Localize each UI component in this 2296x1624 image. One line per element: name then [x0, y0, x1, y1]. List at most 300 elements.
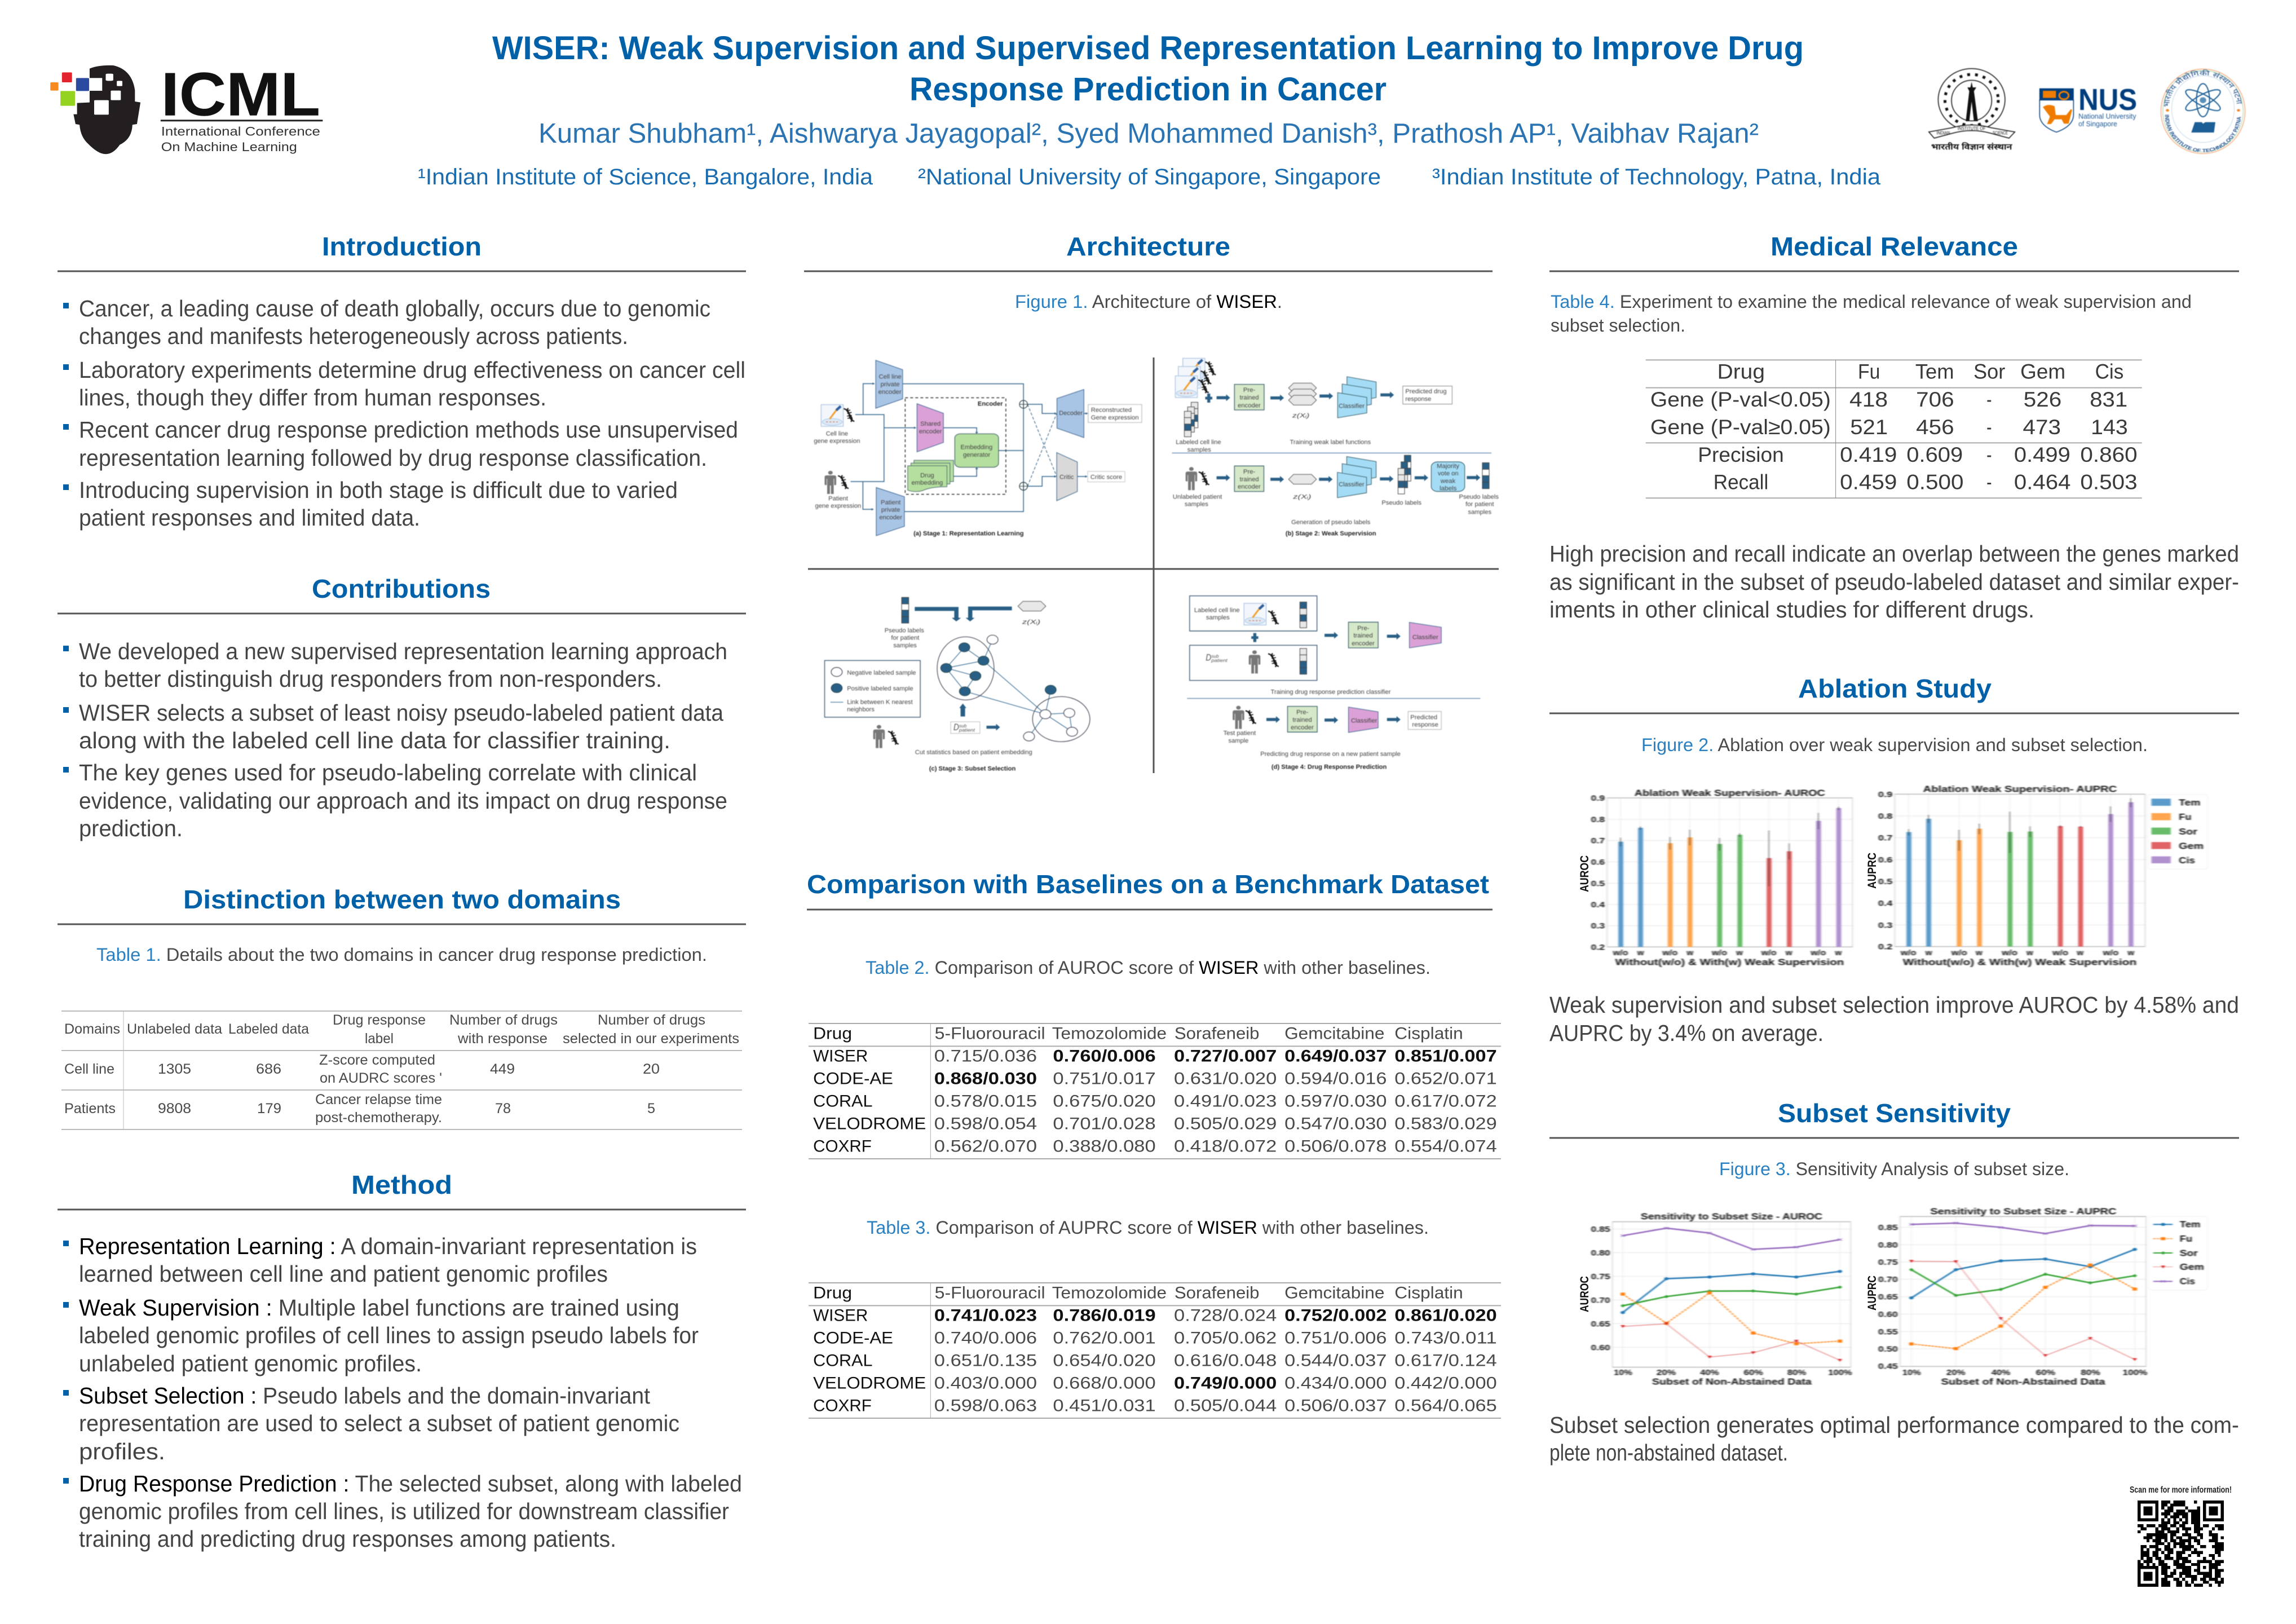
- stage label (c): (c) Stage 3: Subset Selection: [929, 765, 1015, 772]
- line chart: AUPRC sensitivity: 0.45: [1878, 1362, 1898, 1371]
- box: labeled cell line samples: Labeled cell line: [1194, 606, 1240, 614]
- bar chart: AUROC: w: [1736, 948, 1743, 957]
- bullet: supervision: [63, 477, 678, 531]
- bar chart: AUPRC: Ablation Weak Supervision- AUPRC: [1923, 784, 2117, 794]
- block: classifier stack 2: Classifier: [1339, 480, 1365, 488]
- block: classifier 2: Classifier: [1351, 717, 1377, 724]
- line chart: AUPRC sensitivity: 0.55: [1878, 1327, 1898, 1336]
- icon: unlabeled patient: [1186, 467, 1209, 490]
- bar chart: AUROC: 0.9: [1591, 794, 1605, 802]
- line chart: AUROC sensitivity: 0.65: [1591, 1320, 1610, 1329]
- label: labeled cell line samples: [1176, 438, 1221, 453]
- bar chart: AUROC: 0.6: [1591, 858, 1605, 867]
- logo: IIT Patna: भारतीय प्रौद्योगिकी संस्थान पटना: [2163, 69, 2242, 107]
- label: pseudo labels for patient samples: [885, 626, 924, 649]
- bar chart: AUPRC: w/o: [2103, 948, 2118, 957]
- label: unlabeled patient samples: [1173, 493, 1222, 508]
- text: subset finding: Subset selection generates optimal performance compared to the com-: [1549, 1412, 2239, 1438]
- bar chart: AUROC: 0.7: [1591, 837, 1605, 845]
- bullet: cancer: [63, 295, 710, 349]
- output: predicted drug response: Predicted drug: [1405, 388, 1447, 395]
- bullet: weak supervision: labeled genomic profiles of cell lines to assign pseudo labels for: [79, 1322, 699, 1348]
- table 4: Gene (P-val<0.05): [1650, 387, 1831, 411]
- block: cell line private encoder: encoder: [878, 388, 902, 395]
- bullet: laboratory: [63, 357, 745, 411]
- table 3: 0.705/0.062: [1174, 1328, 1277, 1347]
- pseudo labels stack: [1398, 455, 1411, 494]
- line chart: AUPRC sensitivity: 0.75: [1878, 1258, 1898, 1266]
- text: subset finding: plete non-abstained dataset.: [1549, 1440, 1788, 1466]
- table 3: CORAL: [813, 1351, 872, 1370]
- table 1: on AUDRC scores ': [320, 1070, 442, 1086]
- label: unlabeled patient samples: Unlabeled patient: [1173, 493, 1222, 500]
- output: predicted drug response: [1403, 386, 1452, 404]
- affiliations: [418, 165, 1881, 189]
- table 2: 0.675/0.020: [1053, 1091, 1156, 1110]
- table 3: 0.786/0.019: [1053, 1305, 1156, 1325]
- bar chart: AUPRC: w: [1975, 948, 1982, 957]
- line chart: AUROC sensitivity: 80%: [1787, 1368, 1806, 1377]
- label: pseudo labels for patient samples: [1459, 493, 1499, 515]
- diagram: stage 2 weak supervision: z(Xᵢ): [1292, 493, 1311, 500]
- block: pre-trained encoder: encoder: [1238, 401, 1261, 409]
- block: pre-trained encoder: Pre-: [1357, 624, 1370, 632]
- logo: NUS: NUS: [2078, 83, 2137, 117]
- table 1: 9808: [158, 1101, 191, 1116]
- caption: Figure 2: Figure 2. Ablation over weak supervision and subset selection.: [1641, 735, 2148, 755]
- output: reconstructed gene expression: Gene expression: [1091, 414, 1139, 421]
- bar chart: AUPRC: w: [2127, 948, 2134, 957]
- table 2: Drug: [813, 1024, 852, 1043]
- output: critic score: [1088, 471, 1125, 482]
- logo: ICML: On Machine Learning: [161, 140, 297, 154]
- bullet: drug response prediction: Drug Response Prediction : The selected subset, along with labeled: [79, 1471, 742, 1497]
- table 2: 0.701/0.028: [1053, 1114, 1156, 1133]
- table 3: Temozolomide: [1052, 1283, 1167, 1302]
- bar chart: AUPRC: w: [2026, 948, 2033, 957]
- box: patient subset: patient: [1211, 658, 1228, 664]
- table 3: 5-Fluorouracil: [935, 1283, 1045, 1302]
- bar chart: AUPRC: 0.9: [1878, 790, 1892, 799]
- text: 0.652/0.071: [1394, 1069, 1497, 1088]
- line chart: AUPRC sensitivity: 0.50: [1878, 1345, 1898, 1353]
- bar chart: AUROC: 0.5: [1591, 879, 1605, 888]
- table 3: 0.598/0.063: [934, 1396, 1037, 1415]
- block: classifier 2: [1348, 707, 1378, 732]
- block: decoder: [1057, 390, 1084, 438]
- table 4: Drug: [1717, 360, 1765, 383]
- table 4: 143: [2091, 415, 2128, 439]
- caption: Table 3: Table 3. Comparison of AUPRC score of WISER with other baselines.: [867, 1217, 1429, 1238]
- heading: Introduction: Introduction: [322, 232, 482, 261]
- heading: Medical Relevance: Medical Relevance: [1770, 232, 2018, 261]
- block: pre-trained encoder: [1234, 385, 1264, 410]
- icon: patient: [824, 471, 849, 494]
- block: majority vote: [1431, 462, 1465, 492]
- label: cell line gene expression: Cell line: [826, 430, 848, 437]
- panel: Subset Sensitivity: [1549, 1098, 2239, 1466]
- bullet: drug response prediction: training and predicting drug responses among patients.: [79, 1526, 616, 1552]
- table 3: 0.651/0.135: [934, 1351, 1037, 1370]
- label: pseudo labels for patient samples: Pseudo labels: [1459, 493, 1499, 500]
- diagram: stage 3 subset selection: z(Xᵢ): [1022, 619, 1040, 625]
- bar chart: AUROC: w/o: [1761, 948, 1777, 957]
- table 4: -: [1986, 443, 1992, 466]
- legend: ablation drugs: Cis: [2179, 855, 2195, 866]
- text: 0.554/0.074: [1394, 1136, 1497, 1155]
- bullet: weak supervision: Weak Supervision : Multiple label functions are trained using: [79, 1295, 679, 1321]
- block: patient private encoder: [876, 488, 904, 536]
- bar chart: AUROC: w: [1686, 948, 1693, 957]
- table 1: Z-score computed: [319, 1052, 435, 1068]
- bar chart: AUROC: Without(w/o) & With(w) Weak Supervision: [1615, 957, 1844, 967]
- logo: ICML: [50, 60, 323, 154]
- line chart: AUROC sensitivity: 60%: [1744, 1368, 1763, 1377]
- table 1: 20: [643, 1061, 660, 1077]
- bullet: key genes: prediction.: [79, 815, 183, 841]
- block: classifier: Classifier: [1412, 633, 1438, 641]
- table 1: 1305: [158, 1061, 191, 1077]
- line chart: AUPRC sensitivity: 60%: [2036, 1368, 2055, 1377]
- table 4: Precision: [1698, 443, 1784, 466]
- output: critic score: Critic score: [1090, 473, 1122, 480]
- block: pre-trained encoder: [1348, 622, 1378, 648]
- table 3: 0.740/0.006: [934, 1328, 1037, 1347]
- bar chart: AUROC: 0.3: [1591, 922, 1605, 930]
- block: shared encoder: encoder: [919, 427, 942, 435]
- text: ablation finding: AUPRC by 3.4% on average.: [1549, 1020, 1823, 1046]
- table 3: Gemcitabine: [1284, 1283, 1384, 1302]
- bar chart: AUROC: 0.8: [1591, 815, 1605, 824]
- text: 0.861/0.020: [1394, 1305, 1497, 1325]
- line chart: AUPRC sensitivity: 20%: [1946, 1368, 1966, 1377]
- bar chart: AUROC: w/o: [1662, 948, 1677, 957]
- label: test patient sample: [1224, 729, 1256, 744]
- title: WISER: Weak Supervision and Supervised Representation Learning to Improve Drug: [492, 30, 1804, 67]
- output: predicted response: [1408, 712, 1441, 730]
- bar chart: AUROC: w: [1637, 948, 1644, 957]
- block: majority vote: weak: [1440, 477, 1455, 484]
- table 3: 0.741/0.023: [934, 1305, 1037, 1325]
- block: classifier stack 2: [1337, 457, 1376, 498]
- table 4: Sor: [1973, 360, 2005, 383]
- diagram: stage 2 weak supervision: Generation of pseudo labels: [1291, 518, 1371, 526]
- label: patient gene expression: Patient: [828, 495, 848, 502]
- table 1: 179: [257, 1101, 281, 1116]
- text: medical relevance finding: iments in other clinical studies for different drugs.: [1549, 597, 2034, 623]
- line chart: AUPRC sensitivity: 10%: [1902, 1368, 1921, 1377]
- bullet: recent methods: Recent cancer drug response prediction methods use unsupervised: [79, 417, 738, 443]
- line chart: AUPRC sensitivity: 0.60: [1878, 1310, 1898, 1319]
- table 1: Unlabeled data: [127, 1021, 222, 1037]
- panel: Introduction: [58, 232, 746, 531]
- box: D sub patient: sub: [959, 723, 966, 729]
- block: drug embedding: Drug: [920, 471, 934, 479]
- icon: test patient: [1233, 706, 1256, 729]
- table 2: 0.631/0.020: [1174, 1069, 1277, 1088]
- block: majority vote: vote on: [1438, 470, 1459, 477]
- label: labeled cell line samples: samples: [1187, 446, 1211, 453]
- table 4: 456: [1916, 415, 1954, 439]
- bullet: representation learning: Representation Learning : A domain-invariant representation is: [79, 1233, 697, 1259]
- block: pre-trained encoder 2: Pre-: [1296, 708, 1309, 716]
- table 1: Number of drugs: [449, 1012, 558, 1028]
- output: predicted response: Predicted: [1410, 713, 1437, 721]
- table 3: 0.752/0.002: [1284, 1305, 1387, 1325]
- pseudo labels bar: [1482, 463, 1489, 489]
- line chart: AUPRC sensitivity: Subset of Non-Abstained Data: [1941, 1376, 2105, 1387]
- legend: [824, 660, 920, 717]
- block: embedding generator: [955, 434, 999, 467]
- legend: ablation drugs: Sor: [2179, 827, 2197, 837]
- block: pre-trained encoder 2: [1287, 707, 1317, 732]
- text: International Conference: [161, 125, 320, 139]
- table 2: COXRF: [813, 1136, 872, 1155]
- diagram: stage 2 weak supervision: [1172, 358, 1499, 537]
- table 3: 0.728/0.024: [1174, 1305, 1277, 1325]
- box: patient subset: D: [1206, 652, 1211, 663]
- table 2: CODE-AE: [813, 1069, 893, 1088]
- legend: sensitivity drugs: Cis: [2180, 1276, 2195, 1286]
- label: test patient sample: Test patient: [1224, 729, 1256, 736]
- line chart: AUPRC sensitivity: 80%: [2081, 1368, 2100, 1377]
- text: subset finding: [1549, 1412, 2239, 1466]
- heading: Architecture: Architecture: [1066, 232, 1230, 261]
- block: pre-trained encoder 2: trained: [1292, 716, 1312, 723]
- line chart: AUROC sensitivity: Sensitivity to Subset Size - AUROC: [1641, 1211, 1822, 1221]
- bar chart: AUROC: w: [1835, 948, 1842, 957]
- bar chart: AUPRC: 0.3: [1878, 921, 1892, 930]
- bar chart: AUROC: w/o: [1613, 948, 1628, 957]
- text: ICML: [161, 60, 320, 129]
- block: pre-trained encoder: Pre-: [1243, 386, 1255, 394]
- text: ablation finding: Weak supervision and subset selection improve AUROC by 4.58% and: [1549, 992, 2239, 1018]
- line chart: AUROC sensitivity: 0.70: [1591, 1296, 1610, 1305]
- bullet: new approach: We developed a new supervised representation learning approach: [79, 638, 727, 664]
- title: [492, 30, 1804, 108]
- box: D sub patient: patient: [959, 728, 975, 733]
- table 1: Domains: [64, 1021, 120, 1037]
- table 4: 0.860: [2080, 443, 2138, 466]
- diagram: stage 4 drug response prediction: Training drug response prediction classifier: [1271, 688, 1391, 695]
- bar chart: AUPRC: w/o: [1951, 948, 1967, 957]
- logo: IISc: SCIENCE: [1993, 131, 2008, 136]
- heading: Ablation Study: Ablation Study: [1798, 674, 1992, 703]
- output: reconstructed gene expression: [1088, 404, 1142, 422]
- table 1: 5: [647, 1101, 655, 1116]
- table 3: [809, 1283, 1501, 1418]
- block: pre-trained encoder 2: trained: [1240, 475, 1259, 483]
- caption: Table 1: Table 1. Details about the two domains in cancer drug response prediction.: [96, 945, 707, 965]
- caption: Table 4: Table 4. Experiment to examine the medical relevance of weak supervision and: [1551, 292, 2192, 312]
- block: critic: Critic: [1059, 473, 1074, 480]
- bar chart: AUPRC: AUPRC: [1866, 853, 1879, 889]
- table 4: 0.419: [1840, 443, 1897, 466]
- bullet: supervision: Introducing supervision in both stage is difficult due to varied: [79, 477, 678, 503]
- table 1: 449: [490, 1061, 515, 1077]
- line chart: AUROC sensitivity: 0.75: [1591, 1272, 1610, 1281]
- table 2: 0.578/0.015: [934, 1091, 1037, 1110]
- block: cell line private encoder: Cell line: [878, 373, 902, 380]
- bullet: weak supervision: [63, 1295, 699, 1376]
- embedding hexagons: [1288, 383, 1317, 405]
- legend: sensitivity drugs: Gem: [2180, 1262, 2204, 1272]
- panel: Contributions: [58, 574, 746, 841]
- table 2: WISER: [813, 1046, 868, 1065]
- text: 0.583/0.029: [1394, 1114, 1497, 1133]
- icon: cell line flask: [821, 405, 854, 426]
- legend: Positive labeled sample: [847, 685, 913, 692]
- table 1: Patients: [64, 1101, 116, 1116]
- logo: IIT Patna: INDIAN INSTITUTE OF TECHNOLOGY PATNA: [2164, 114, 2242, 153]
- line chart: AUROC sensitivity: 0.85: [1591, 1225, 1610, 1234]
- table 4: Recall: [1714, 470, 1768, 494]
- bullet: weak supervision: unlabeled patient genomic profiles.: [79, 1351, 422, 1376]
- bar chart: AUPRC: 0.6: [1878, 855, 1892, 864]
- logo: NUS: of Singapore: [2078, 120, 2117, 129]
- table 3: CODE-AE: [813, 1328, 893, 1347]
- caption: Table 2: Table 2. Comparison of AUROC score of WISER with other baselines.: [866, 957, 1430, 978]
- table 2: 0.715/0.036: [934, 1046, 1037, 1065]
- box: labeled cell line samples: samples: [1206, 614, 1230, 621]
- table 4: 0.499: [2014, 443, 2070, 466]
- table 2: 5-Fluorouracil: [935, 1024, 1045, 1043]
- bullet: recent methods: [63, 417, 738, 471]
- bar chart: AUROC: w/o: [1811, 948, 1826, 957]
- text: 0.851/0.007: [1394, 1046, 1497, 1065]
- label: unlabeled patient samples: samples: [1185, 500, 1208, 508]
- line chart: AUPRC sensitivity: 40%: [1992, 1368, 2010, 1377]
- table 4: 706: [1916, 387, 1954, 411]
- block: patient private encoder: Patient: [881, 498, 901, 506]
- table 4: -: [1986, 415, 1992, 439]
- bar chart: AUPRC: 0.2: [1878, 943, 1892, 951]
- bar chart: AUROC: 0.2: [1591, 943, 1605, 952]
- line chart: AUPRC sensitivity: 0.70: [1878, 1276, 1898, 1284]
- block: decoder: Decoder: [1059, 409, 1083, 417]
- table 1: 686: [256, 1061, 281, 1077]
- bar chart: AUPRC: w: [1925, 948, 1932, 957]
- line chart: AUROC sensitivity: 40%: [1700, 1368, 1719, 1377]
- heading: Contributions: Contributions: [312, 574, 491, 603]
- block: pre-trained encoder: encoder: [1352, 639, 1375, 647]
- table 1: [61, 1011, 742, 1129]
- text: ablation finding: [1549, 992, 2239, 1046]
- table 4: 0.500: [1906, 470, 1963, 494]
- table 4: 0.503: [2080, 470, 2138, 494]
- bullet: representation learning: [63, 1233, 697, 1287]
- line chart: AUPRC sensitivity: 0.80: [1878, 1241, 1898, 1250]
- bullet: subset: [63, 700, 723, 753]
- legend: ablation drugs: [2148, 795, 2207, 869]
- table 4: 0.459: [1840, 470, 1897, 494]
- bullet: key genes: evidence, validating our approach and its impact on drug response: [79, 788, 727, 814]
- logo: NUS: National University: [2078, 113, 2136, 121]
- label: cell line gene expression: gene expression: [814, 437, 860, 444]
- table 3: 0.654/0.020: [1053, 1351, 1156, 1370]
- bullet: subset selection: representation are used to select a subset of patient genomic: [79, 1410, 679, 1436]
- bar chart: AUROC: Ablation Weak Supervision- AUROC: [1635, 788, 1825, 798]
- text: medical relevance finding: [1549, 541, 2239, 623]
- line chart: AUROC sensitivity: 0.80: [1591, 1248, 1610, 1257]
- table 4: -: [1986, 470, 1992, 494]
- table 1: with response: [457, 1031, 547, 1047]
- block: shared encoder: [917, 404, 943, 452]
- table 4: 521: [1850, 415, 1888, 439]
- legend: ablation drugs: Fu: [2179, 812, 2192, 822]
- panel: Method: [58, 1170, 746, 1552]
- legend: sensitivity drugs: [2149, 1216, 2207, 1290]
- line chart: AUPRC sensitivity: [1866, 1206, 2148, 1387]
- block: cell line private encoder: private: [881, 381, 900, 388]
- bullet: cancer: Cancer, a leading cause of death globally, occurs due to genomic: [79, 295, 710, 321]
- box: D sub patient: D: [953, 722, 959, 732]
- panel: Medical Relevance: [1549, 232, 2239, 623]
- line chart: AUPRC sensitivity: Sensitivity to Subset Size - AUPRC: [1930, 1206, 2116, 1216]
- block: pre-trained encoder 2: encoder: [1291, 723, 1314, 731]
- text: medical relevance finding: High precision and recall indicate an overlap between the genes marked: [1549, 541, 2239, 567]
- panel: Comparison with Baselines: [807, 870, 1501, 1418]
- table 4: -: [1986, 387, 1992, 411]
- bullet: drug response prediction: genomic profiles from cell lines, is utilized for downstream classifier: [79, 1498, 729, 1524]
- table 4: Fu: [1858, 360, 1880, 383]
- block: embedding generator: Embedding: [961, 443, 992, 451]
- table 1: Drug response: [333, 1012, 426, 1028]
- affiliations: ³Indian Institute of Technology, Patna, India: [1432, 165, 1881, 189]
- box: patient subset: [1190, 645, 1317, 681]
- bar chart: AUPRC: 0.5: [1878, 877, 1892, 886]
- table 2: CORAL: [813, 1091, 872, 1110]
- table 4: 526: [2024, 387, 2061, 411]
- table 2: 0.751/0.017: [1053, 1069, 1156, 1088]
- table 1: 78: [495, 1101, 511, 1116]
- caption: Figure 3: Figure 3. Sensitivity Analysis of subset size.: [1719, 1159, 2069, 1179]
- line chart: AUPRC sensitivity: 0.85: [1878, 1223, 1898, 1232]
- table 3: Drug: [813, 1283, 852, 1302]
- heading: Subset Sensitivity: Subset Sensitivity: [1778, 1098, 2011, 1128]
- table 3: 0.749/0.000: [1174, 1373, 1277, 1392]
- bullet: recent methods: representation learning followed by drug response classification.: [79, 445, 707, 471]
- diagram: stage 3 subset selection: [824, 597, 1090, 772]
- diagram: stage 1 representation learning: [814, 360, 1142, 537]
- stage label (a): (a) Stage 1: Representation Learning: [913, 529, 1024, 537]
- table 2: Cisplatin: [1394, 1024, 1463, 1043]
- stage label (d): (d) Stage 4: Drug Response Prediction: [1271, 763, 1387, 770]
- text: 0.617/0.124: [1394, 1351, 1497, 1370]
- block: classifier: [1410, 623, 1441, 648]
- line chart: AUPRC sensitivity: 100%: [2123, 1368, 2148, 1377]
- table 3: 0.451/0.031: [1053, 1396, 1156, 1415]
- bullet: subset: along with the labeled cell line data for classifier training.: [79, 727, 670, 753]
- line chart: AUROC sensitivity: 0.60: [1591, 1343, 1610, 1352]
- text: 0.442/0.000: [1394, 1373, 1497, 1392]
- block: drug embedding: embedding: [912, 479, 943, 486]
- block: pre-trained encoder: trained: [1240, 394, 1259, 401]
- table 1: label: [365, 1031, 394, 1047]
- block: pre-trained encoder 2: [1234, 466, 1264, 492]
- legend: neighbors: [847, 705, 875, 713]
- table 4: Gene (P-val≥0.05): [1650, 415, 1831, 439]
- legend: sensitivity drugs: Fu: [2180, 1234, 2192, 1244]
- table 2: VELODROME: [813, 1114, 926, 1133]
- table 3: 0.751/0.006: [1284, 1328, 1387, 1347]
- table 3: 0.668/0.000: [1053, 1373, 1156, 1392]
- box: labeled cell line samples: [1190, 596, 1317, 631]
- heading: Comparison: Comparison with Baselines on a Benchmark Dataset: [807, 870, 1489, 899]
- label: pseudo labels for patient samples: for patient: [1465, 500, 1494, 508]
- pseudo labels bar: [902, 597, 909, 623]
- text: 0.617/0.072: [1394, 1091, 1497, 1110]
